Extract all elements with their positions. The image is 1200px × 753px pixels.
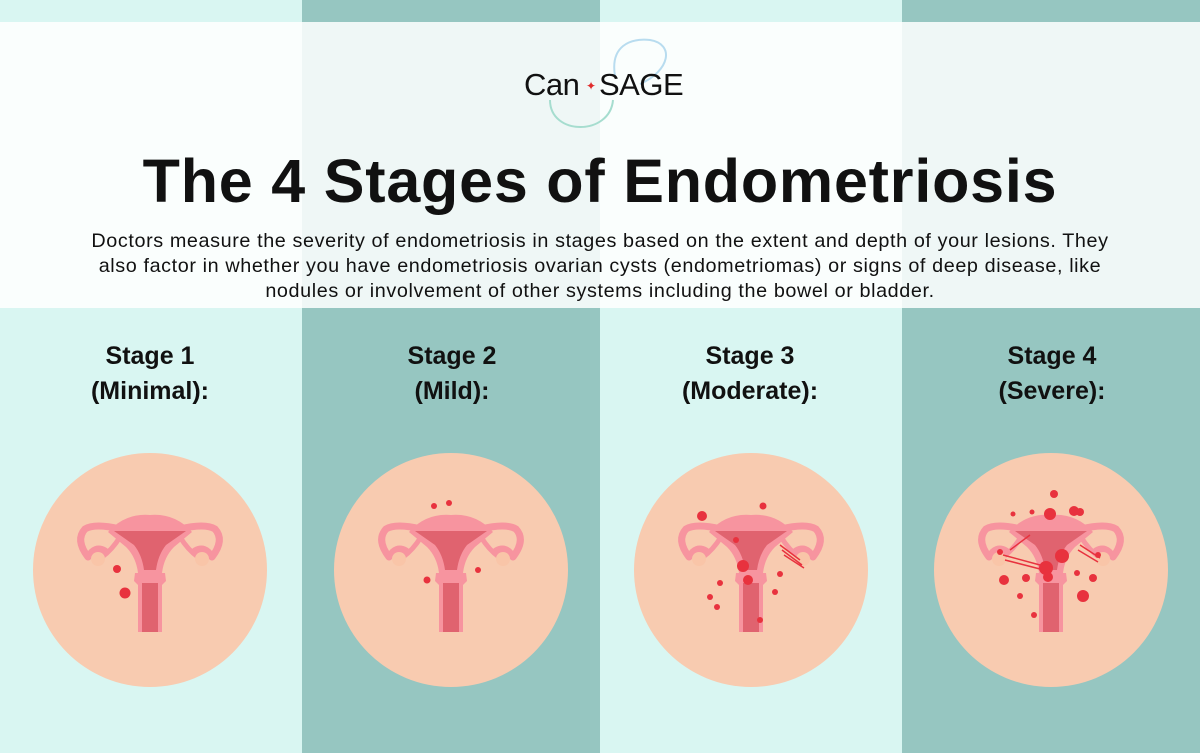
stage 2 heading: (Mild): [415,377,489,405]
intro paragraph: Doctors measure the severity of endometriosis in stages based on the extent and depth of your lesions. They [91,230,1109,252]
title: The 4 Stages of Endometriosis [143,147,1057,215]
stage 4 heading: Stage 4 [1008,342,1096,370]
stage 2 illustration [334,453,568,687]
logo: SAGE [599,67,683,102]
stage 3 heading: (Moderate): [682,377,818,405]
stage 3 heading [682,342,818,405]
stage 1 heading: (Minimal): [91,377,209,405]
header panel [0,22,1200,308]
stage 4 heading [998,342,1106,405]
stage 4 illustration [934,453,1168,687]
stage 4 heading: (Severe): [998,377,1106,405]
logo: Can [524,67,579,102]
stage 1 heading: Stage 1 [106,342,194,370]
stage 3 illustration [634,453,868,687]
intro paragraph [91,230,1109,302]
stage 2 heading [408,342,496,405]
intro paragraph: nodules or involvement of other systems including the bowel or bladder. [265,280,935,302]
logo [524,38,683,128]
stage 1 illustration [33,453,267,687]
stage 2 heading: Stage 2 [408,342,496,370]
stage 1 heading [91,342,209,405]
stage 3 heading: Stage 3 [706,342,794,370]
intro paragraph: also factor in whether you have endometriosis ovarian cysts (endometriomas) or signs of deep disease, like [99,255,1101,277]
logo: ✦ [586,79,596,93]
